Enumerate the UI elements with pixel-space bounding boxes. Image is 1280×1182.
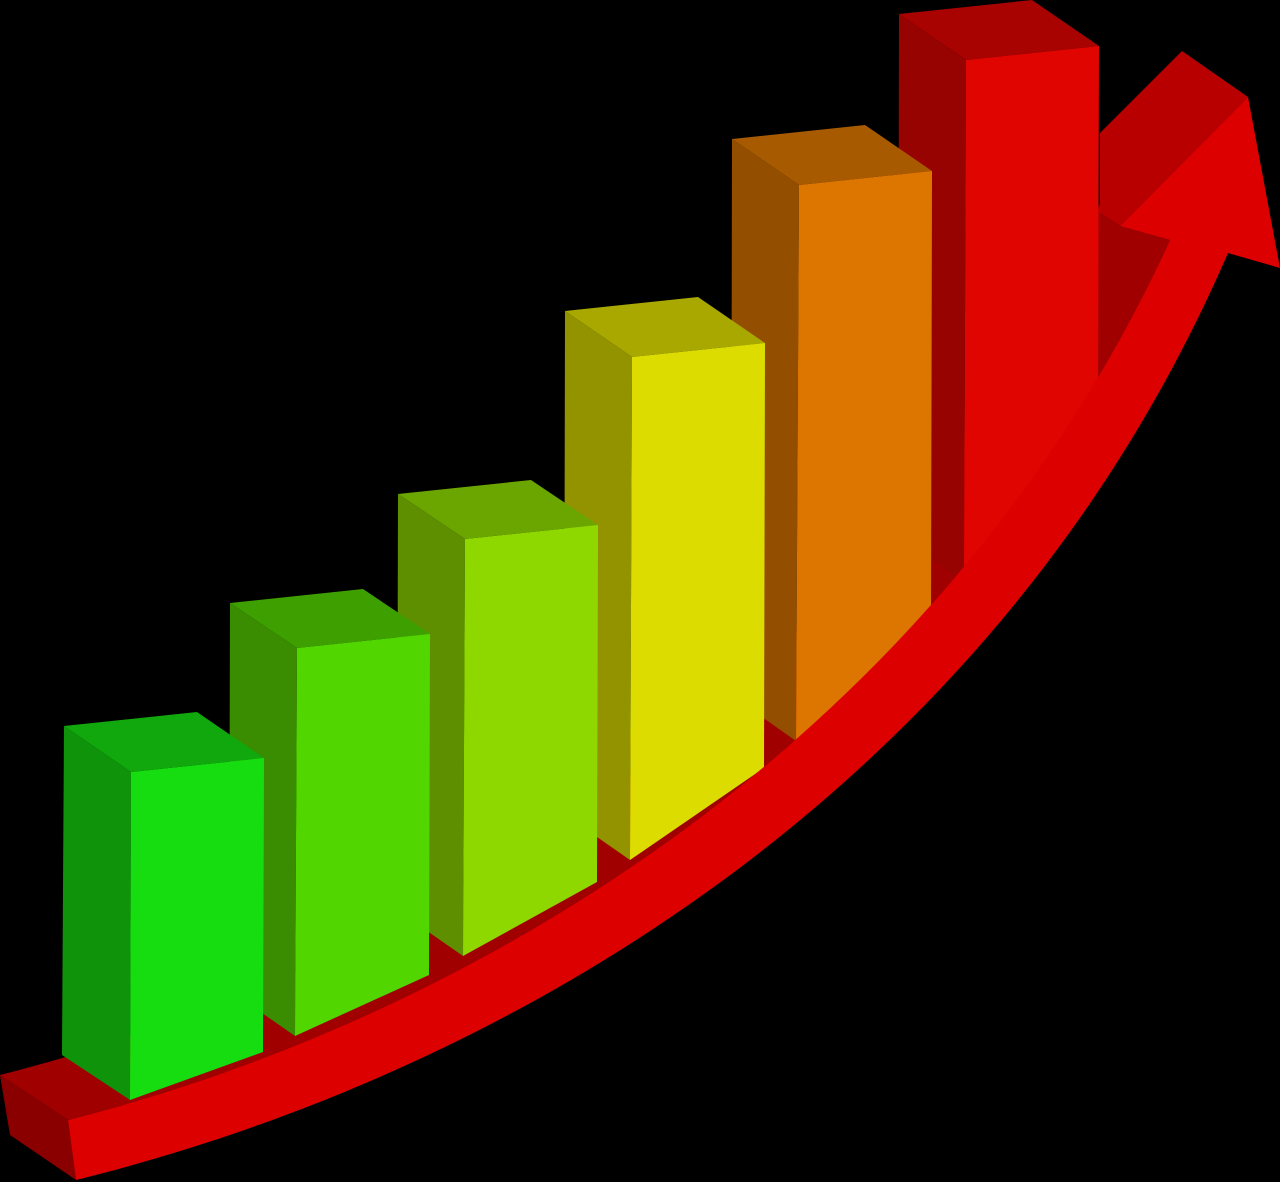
bar 4 yellow	[564, 297, 765, 860]
bar 1 green	[62, 712, 264, 1100]
bar 5 orange	[731, 125, 932, 741]
bar 2	[229, 589, 430, 1036]
arrow: head back face	[1100, 51, 1248, 226]
bar 6 red	[898, 0, 1099, 582]
bar 3	[397, 480, 598, 956]
arrow: band top face	[0, 195, 1170, 1120]
